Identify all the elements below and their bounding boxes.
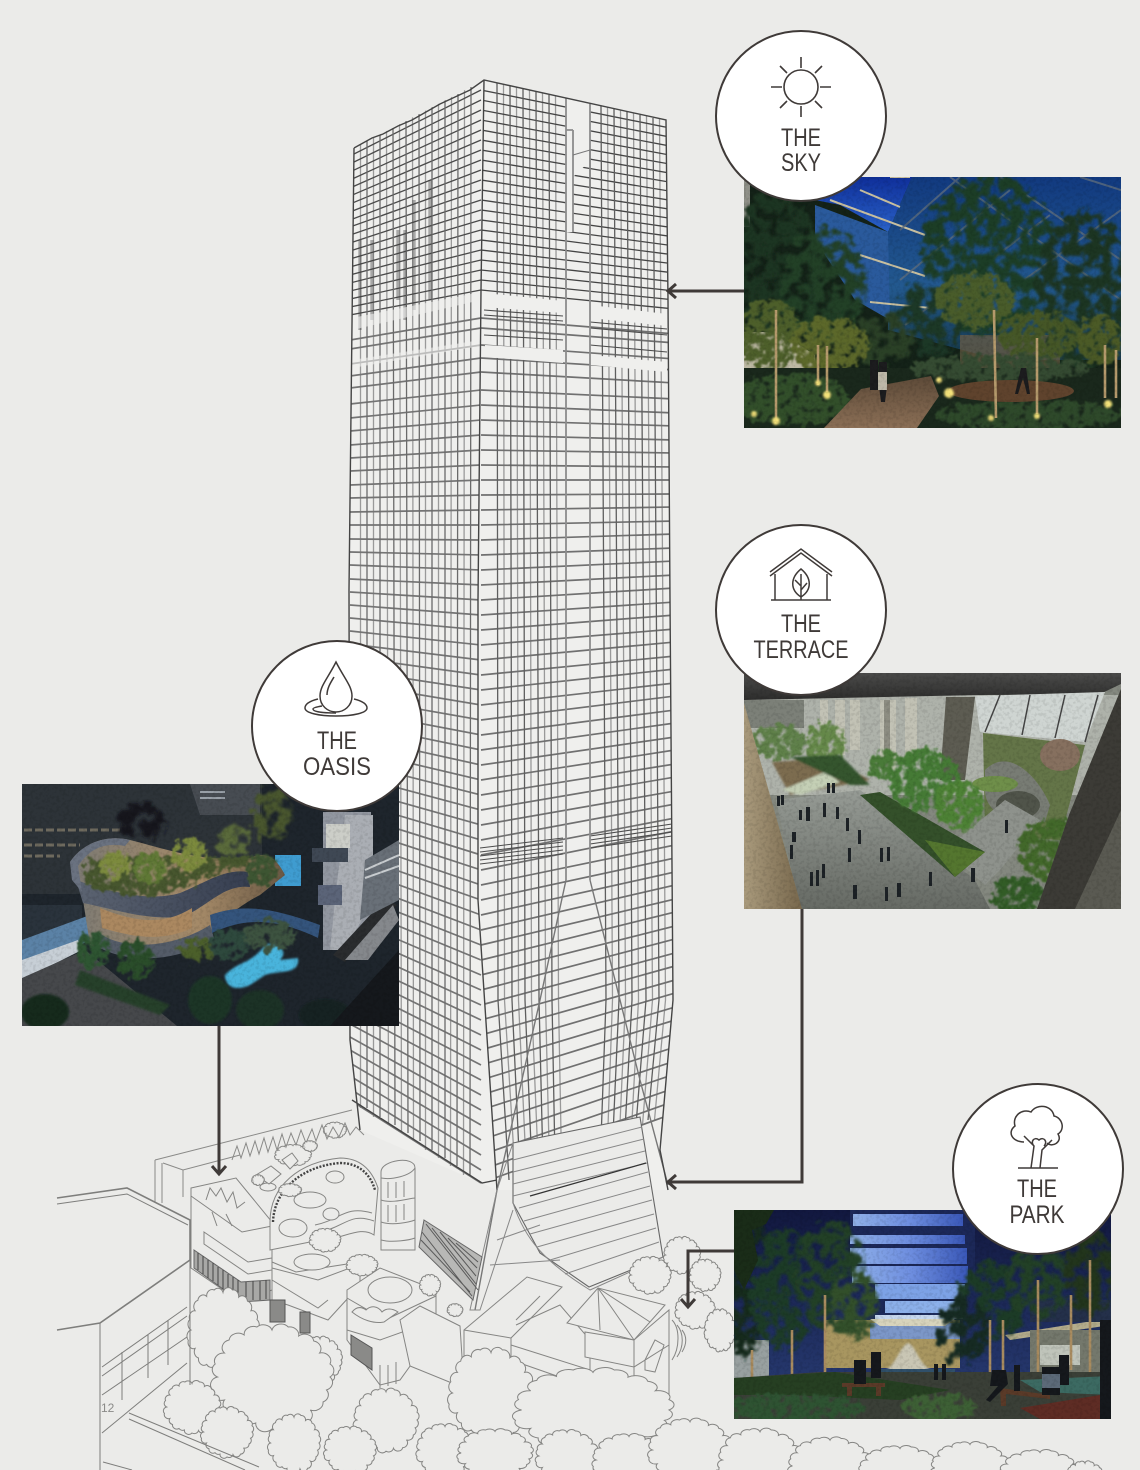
tree canopy right of tower bbox=[629, 1236, 736, 1352]
right face half-step lines bbox=[504, 83, 666, 1180]
photo: the oasis bbox=[21, 784, 399, 1031]
left face light bands bbox=[352, 292, 481, 368]
badge: the park bbox=[953, 1084, 1123, 1254]
heading: the oasis bbox=[303, 727, 371, 781]
terrace columns bbox=[940, 697, 975, 780]
park tree canopy bbox=[719, 1202, 1116, 1364]
sky garden figures bbox=[870, 360, 1030, 402]
photo: the sky garden bbox=[730, 175, 1133, 430]
right face upper floor lines bbox=[481, 90, 675, 309]
tower: left face bbox=[350, 87, 482, 1184]
sky garden photo grain bbox=[744, 177, 1121, 428]
heading: the sky: SKY bbox=[781, 149, 821, 177]
heading: the oasis: OASIS bbox=[303, 753, 371, 781]
arrow: sky garden to tower bbox=[668, 284, 744, 298]
cylindrical stair bbox=[381, 1160, 415, 1250]
heading: the terrace bbox=[754, 610, 848, 664]
podium building: the oasis terraces bbox=[191, 1153, 464, 1388]
sky garden trunks bbox=[776, 310, 1116, 420]
right face mullions bbox=[497, 83, 659, 1180]
terrace photo grain bbox=[744, 673, 1121, 909]
sky garden lit foliage bbox=[738, 272, 1122, 373]
park fountain bbox=[878, 1343, 945, 1375]
badge: the oasis bbox=[252, 641, 422, 811]
park entrance bbox=[826, 1320, 960, 1368]
photo: the park bbox=[715, 1202, 1116, 1422]
sky garden tree canopy bbox=[731, 175, 1133, 370]
oasis rear pool and stairs bbox=[275, 855, 301, 886]
oasis background trees bbox=[116, 789, 292, 856]
park lawn bbox=[734, 1372, 1111, 1419]
terrace planter bbox=[860, 792, 985, 877]
heading: the sky bbox=[781, 124, 821, 177]
terrace floor bbox=[776, 790, 990, 909]
badge: the sky bbox=[716, 31, 886, 201]
park right pavilion bbox=[1005, 1318, 1111, 1340]
curved corner pavilion bbox=[347, 1268, 436, 1388]
left face half-step lines bbox=[360, 87, 464, 1175]
heading: the sky: THE bbox=[781, 124, 821, 152]
page number: 12 bbox=[101, 1401, 115, 1415]
heading: the oasis: THE bbox=[317, 727, 357, 755]
left face dark shadow strips bbox=[360, 180, 430, 330]
plaza block and pavilion bbox=[464, 1277, 686, 1405]
park photo grain bbox=[734, 1210, 1111, 1419]
tower outline bbox=[349, 80, 673, 1190]
icon: water drop with ripples bbox=[305, 662, 367, 716]
icon: house with leaf bbox=[770, 549, 832, 600]
right face lower floor lines bbox=[481, 318, 675, 1183]
icon: sun bbox=[771, 57, 831, 117]
curved garden terrace bbox=[256, 1153, 378, 1250]
heading: the park bbox=[1010, 1175, 1065, 1229]
left face floor lines bbox=[350, 90, 481, 315]
arrow: park to garden bbox=[681, 1251, 734, 1307]
terrace visitors bbox=[777, 783, 1008, 901]
arrow: terrace to tower base bbox=[668, 909, 802, 1189]
park benches and people bbox=[842, 1383, 1050, 1406]
back wall and hedge of the podium bbox=[155, 1110, 364, 1203]
oasis foreground tree masses bbox=[21, 970, 351, 1031]
foreground tree canopy bbox=[163, 1288, 1106, 1470]
badge: the terrace bbox=[716, 525, 886, 695]
left face mullions bbox=[367, 87, 471, 1175]
lower terrace bbox=[270, 1254, 360, 1333]
terrace side walls bbox=[744, 703, 802, 909]
oasis photo grain bbox=[22, 784, 399, 1026]
tower base: sail atrium bbox=[470, 1117, 663, 1310]
icon: tree bbox=[1011, 1106, 1062, 1168]
oasis roof garden bbox=[85, 838, 278, 896]
oasis dark plaza bbox=[330, 950, 399, 1026]
heading: the park: THE bbox=[1017, 1175, 1057, 1203]
sky garden uplights bbox=[751, 377, 1112, 425]
heading: the terrace: TERRACE bbox=[754, 636, 848, 664]
oasis curved building bbox=[70, 838, 285, 952]
oasis road bbox=[22, 916, 90, 960]
planter bed bbox=[400, 1306, 464, 1388]
park left building bbox=[734, 1340, 769, 1378]
park tower glazing bbox=[850, 1210, 975, 1310]
heading: the terrace: THE bbox=[781, 610, 821, 638]
right face dark floor band bbox=[480, 310, 672, 864]
photo: the terrace atrium bbox=[744, 673, 1121, 915]
oasis pools bbox=[225, 944, 298, 988]
arrow: oasis to podium bbox=[212, 1026, 226, 1174]
tower: right face bbox=[478, 80, 675, 1190]
podium shrub clusters bbox=[252, 1141, 463, 1317]
terrace rear planters bbox=[772, 755, 870, 795]
neighbouring building outline bbox=[57, 1188, 259, 1470]
park trunks bbox=[752, 1260, 1090, 1395]
left face lower floor lines bbox=[350, 318, 481, 1183]
heading: the park: PARK bbox=[1010, 1201, 1065, 1229]
terrace trees bbox=[869, 748, 1086, 915]
tower base: dark hatched soffit bbox=[419, 1220, 482, 1300]
oasis trees in front bbox=[76, 919, 296, 980]
terrace rear greenery bbox=[754, 721, 846, 769]
left podium block bbox=[191, 1178, 272, 1302]
park foreground foliage bbox=[734, 1210, 774, 1290]
right face white bands bbox=[484, 293, 667, 372]
sky garden ground planting bbox=[730, 354, 1125, 430]
tower atrium slot bbox=[475, 98, 668, 1310]
